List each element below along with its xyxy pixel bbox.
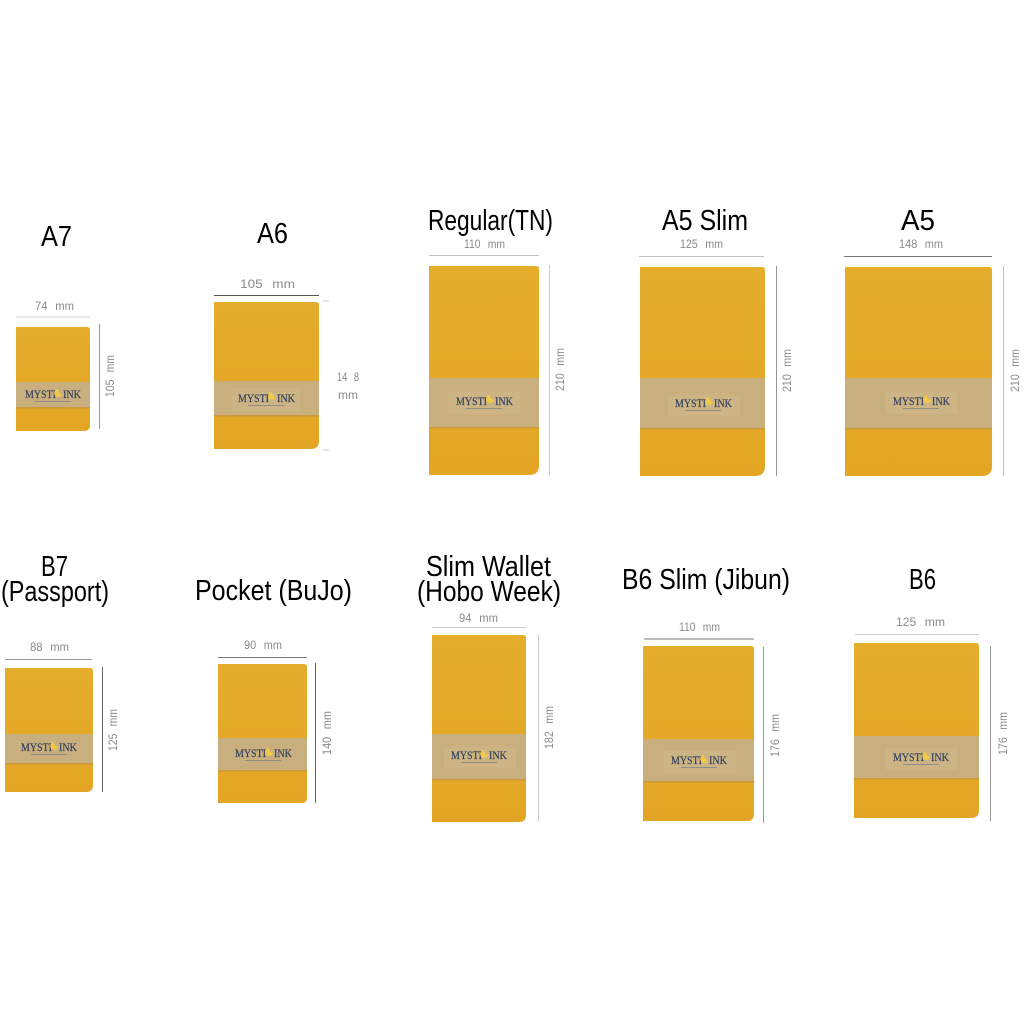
width label: 74 mm: 74 mm [35,299,74,313]
height dimension line [762,647,764,823]
heading: A6: A6 [257,218,288,250]
height label: 176 mm: 176 mm [996,712,1010,755]
width dimension line [855,634,979,636]
kraft band with logo: INK [709,753,727,767]
height dimension line [538,634,540,822]
heading: B7 (Passport) [1,551,109,608]
notebook cover [640,267,765,476]
kraft band with logo: MYSTI [893,750,924,764]
heading: B6: B6 [909,564,936,596]
heading: A7: A7 [41,221,72,253]
height label: 125 mm: 125 mm [106,709,120,751]
kraft band with logo [432,734,526,780]
heading: B7 (Passport): B7 [41,551,68,583]
width dimension line [218,656,307,658]
kraft band with logo: INK [714,396,732,410]
kraft band with logo: INK [59,740,77,754]
width dimension line [214,294,319,296]
panel: Pocket (BuJo) notebook [195,575,352,803]
height label: 210 mm: 210 mm [780,349,794,392]
width dimension line [644,638,754,640]
height label: 182 mm: 182 mm [542,706,556,749]
height label: 105 mm: 105 mm [103,355,117,397]
height label: 176 mm: 176 mm [768,714,782,757]
height ticks [323,301,329,450]
notebook cover [643,646,754,821]
panel: B7 (Passport) notebook [1,551,120,792]
notebook cover [429,266,539,475]
kraft band with logo: INK [277,391,295,405]
heading: A5: A5 [901,205,935,237]
width label: 125 mm: 125 mm [680,237,723,251]
notebook cover [218,664,307,803]
notebook cover [5,668,93,792]
kraft band with logo [218,738,307,772]
notebook cover [16,327,90,431]
panel: B6 notebook [854,564,1010,821]
width label: 110 mm: 110 mm [464,237,505,251]
kraft band with logo: MYSTI [451,748,482,762]
panel: Slim Wallet (Hobo Week) notebook [417,551,561,822]
kraft band with logo: MYSTI [675,396,706,410]
panel: Regular (TN) notebook [428,205,567,475]
heading: Slim Wallet (Hobo Week) [417,551,561,608]
height dimension line [1002,266,1004,476]
kraft band with logo: MYSTI [456,394,487,408]
kraft band with logo [214,381,319,416]
notebook cover [214,302,319,449]
height dimension line [990,646,992,821]
width label: 105 mm: 105 mm [240,277,295,291]
width dimension line [5,658,92,660]
kraft band with logo [640,378,765,430]
kraft band with logo: INK [63,387,81,401]
heading: A5 Slim: A5 Slim [662,205,748,237]
width dimension line [16,316,90,318]
heading: Slim Wallet (Hobo Week): (Hobo Week) [417,576,561,608]
kraft band with logo: INK [489,748,507,762]
width dimension line [844,256,992,258]
height label: 148 mm [337,370,359,402]
panel: A7 notebook [16,221,117,431]
panel: A5 Slim notebook [639,205,794,476]
notebook cover [432,635,526,822]
height dimension line [548,265,550,475]
panel: A6 notebook [214,218,359,450]
heading: Slim Wallet (Hobo Week): Slim Wallet [426,551,551,583]
panel: A5 notebook [844,205,1022,476]
width label: 88 mm: 88 mm [30,640,69,654]
width dimension line [429,254,539,256]
panel: B6 Slim (Jibun) notebook [622,564,790,823]
kraft band with logo: MYSTI [235,746,266,760]
kraft band with logo: INK [932,394,950,408]
height dimension line [314,663,316,803]
height dimension line [776,266,778,476]
kraft band with logo: MYSTI [21,740,52,754]
kraft band with logo [429,378,539,428]
kraft band with logo [5,734,93,764]
heading: B7 (Passport): (Passport) [1,576,109,608]
kraft band with logo: INK [274,746,292,760]
kraft band with logo: MYSTI [25,387,56,401]
width label: 148 mm: 148 mm [899,237,943,251]
height label: 140 mm: 140 mm [320,711,334,755]
heading: B6 Slim (Jibun): B6 Slim (Jibun) [622,564,790,596]
width label: 125 mm: 125 mm [896,615,945,629]
width dimension line [432,626,526,628]
notebook cover [845,267,992,476]
kraft band with logo: MYSTI [893,394,924,408]
heading: Regular(TN): Regular(TN) [428,205,553,237]
kraft band with logo: MYSTI [238,391,269,405]
heading: Pocket (BuJo): Pocket (BuJo) [195,575,352,607]
kraft band with logo: INK [495,394,513,408]
width dimension line [639,256,764,258]
width label: 110 mm: 110 mm [679,620,720,634]
height dimension line [102,667,104,792]
notebook cover [854,643,979,818]
kraft band with logo [16,382,90,408]
height dimension line [98,324,100,429]
height label: 148 mm: mm [338,388,358,402]
kraft band with logo: INK [931,750,949,764]
height label: 148 mm: 14 8 [337,370,359,384]
kraft band with logo [845,378,992,430]
height label: 210 mm: 210 mm [1008,349,1022,392]
kraft band with logo [854,736,979,780]
kraft band with logo: MYSTI [671,753,702,767]
height label: 210 mm: 210 mm [553,348,567,391]
width label: 90 mm: 90 mm [244,638,282,652]
kraft band with logo [643,739,754,782]
width label: 94 mm: 94 mm [459,611,498,625]
